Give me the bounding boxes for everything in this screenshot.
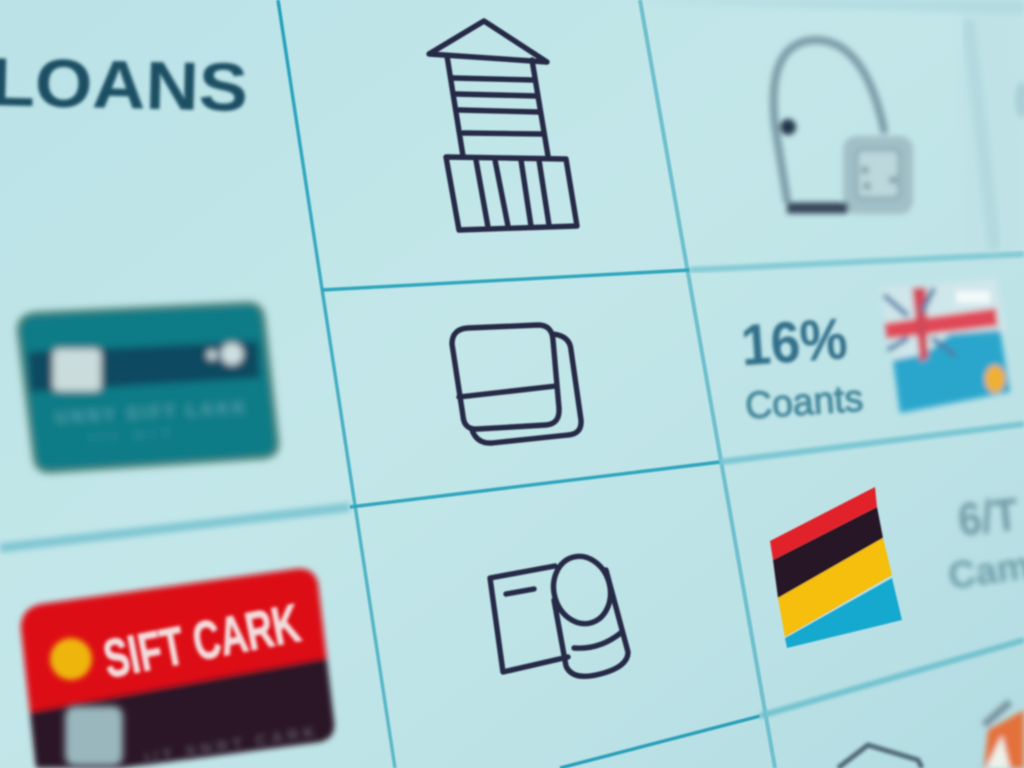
icon: bank building	[429, 21, 577, 230]
stat: 16% Coants	[739, 306, 865, 428]
icon: faint right-edge glyph	[1015, 82, 1024, 118]
card: teal bank card: I/I N/T	[90, 426, 170, 445]
icon: flag with union cross	[880, 278, 1010, 413]
card chip	[65, 706, 123, 766]
icon: wallet card	[452, 325, 581, 443]
stat: 16% Coants: 16%	[739, 306, 849, 378]
icon: padlock, out of focus	[774, 40, 913, 214]
card logo dot	[50, 638, 92, 680]
card: teal bank card: UNNY SIFT LAKK	[55, 398, 246, 427]
icon: striped colour flag	[770, 487, 902, 648]
icon: partial orange flag, corner	[984, 702, 1024, 768]
card: teal bank card	[18, 303, 278, 472]
card number: I/T SNRT CARK	[144, 724, 317, 768]
stat: 16% Coants: Coants	[744, 378, 865, 428]
icon: partial house, bottom edge	[838, 745, 922, 768]
icon: card with coins	[490, 550, 628, 676]
card: red gift card	[16, 564, 339, 768]
stat: blurred 6/T Cam	[946, 488, 1024, 598]
card title: SIFT CARK	[99, 593, 305, 690]
